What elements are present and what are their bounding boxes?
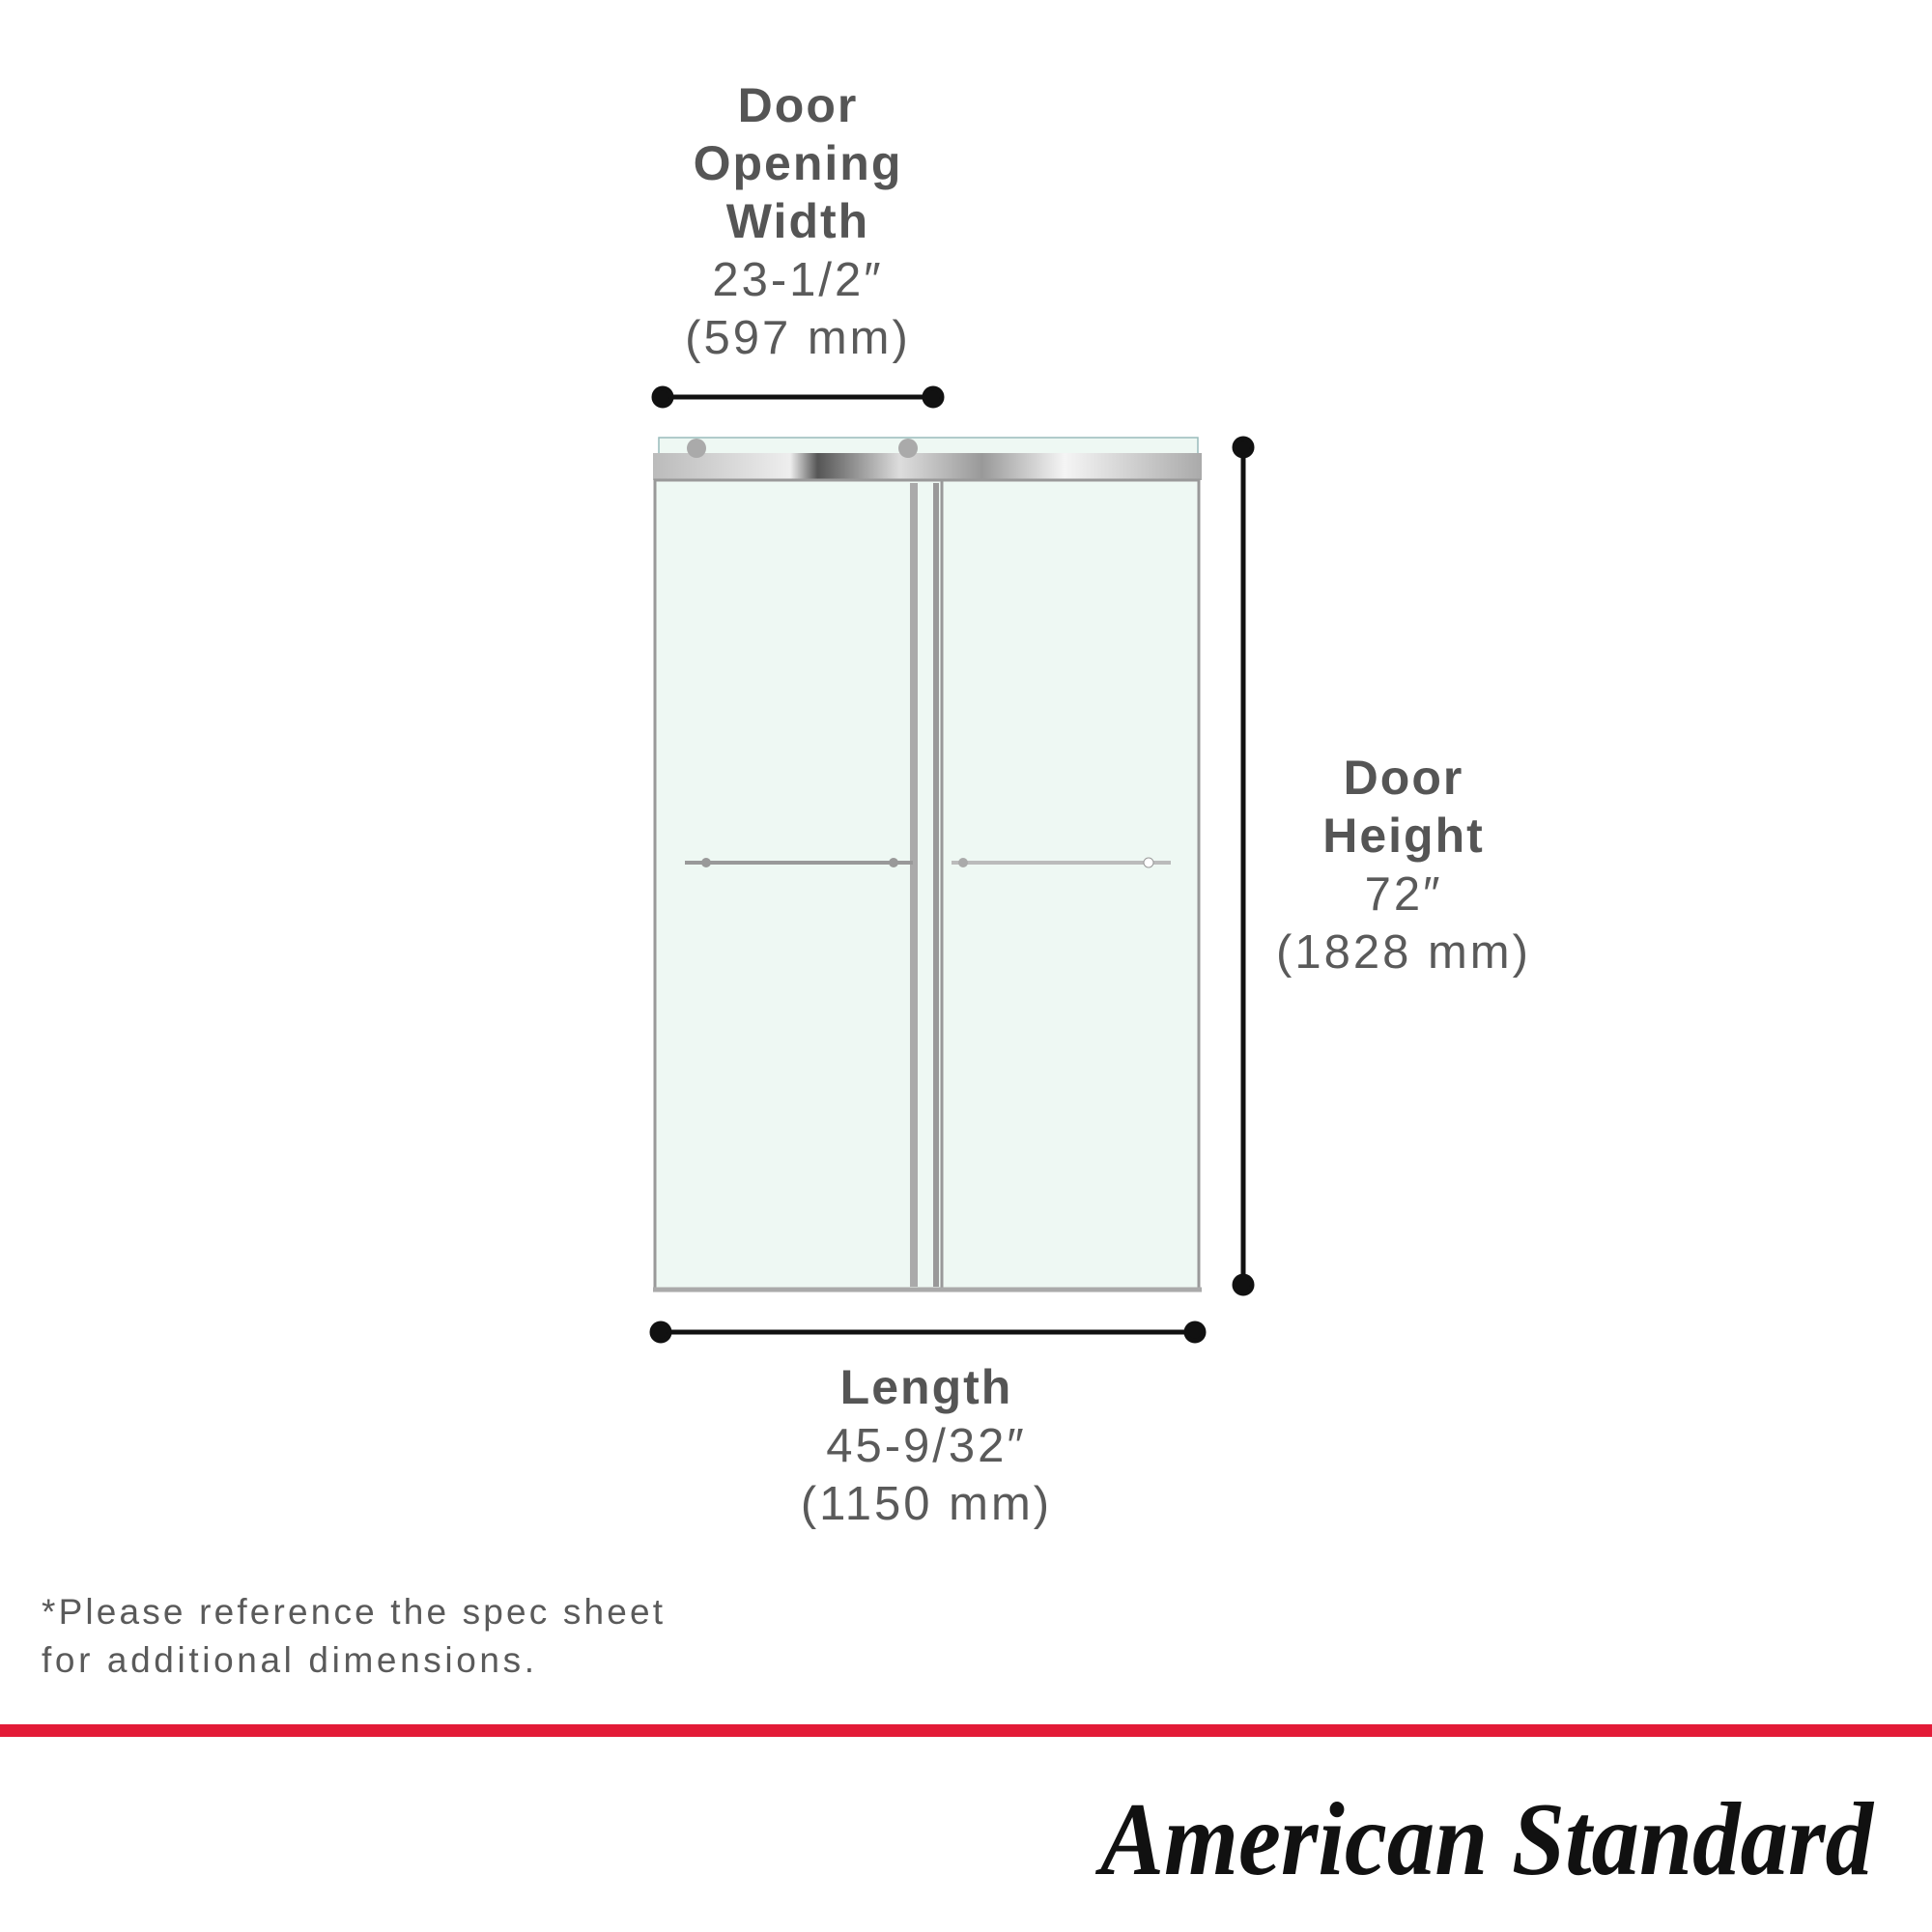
- footnote: for additional dimensions.: [42, 1640, 534, 1680]
- heading: door opening width: Width: [726, 194, 869, 248]
- heading: door opening width: (597 mm): [685, 312, 911, 364]
- heading: door opening width: 23-1/2″: [712, 254, 884, 306]
- red divider: [0, 1724, 1932, 1737]
- dimension line: door opening width: [654, 388, 942, 406]
- heading: length: [801, 1360, 1052, 1530]
- footnote: *Please reference the spec sheet: [42, 1592, 664, 1632]
- dimension line: length: [652, 1323, 1204, 1341]
- heading: door opening width: Opening: [694, 136, 902, 190]
- heading: length: 45-9/32″: [826, 1420, 1027, 1472]
- heading: length: (1150 mm): [801, 1478, 1052, 1530]
- heading: door height: Door: [1344, 751, 1463, 805]
- shower door illustration: [653, 438, 1202, 1290]
- heading: door height: (1828 mm): [1276, 926, 1531, 979]
- heading: door height: 72″: [1365, 868, 1442, 921]
- heading: door height: Height: [1322, 809, 1485, 863]
- heading: length: Length: [840, 1360, 1012, 1414]
- logo: American Standard: American Standard: [1095, 1782, 1875, 1897]
- heading: door opening width: [685, 78, 911, 364]
- heading: door opening width: Door: [738, 78, 858, 132]
- heading: door height: [1276, 751, 1531, 979]
- dimension line: door height: [1235, 439, 1252, 1293]
- footnote: [42, 1592, 664, 1680]
